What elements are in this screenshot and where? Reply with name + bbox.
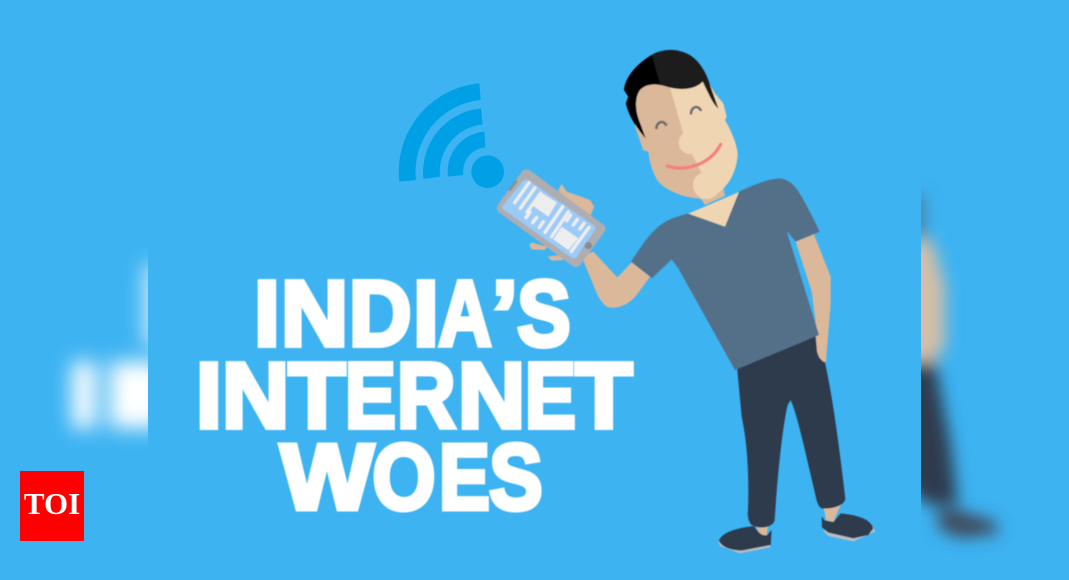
title line 1: S: [517, 262, 571, 366]
title line 1: N: [281, 262, 348, 366]
ankles: [755, 505, 841, 536]
trousers: [737, 330, 845, 528]
title line 1: I: [254, 262, 280, 366]
chin: [693, 172, 720, 199]
title line 3: E: [439, 425, 490, 529]
central sharp panel: [148, 0, 921, 580]
arm and hand holding phone: [529, 184, 650, 308]
shoe: left: [718, 526, 772, 553]
t-shirt: [631, 178, 820, 370]
blurred left background: enlarged title: [72, 265, 174, 428]
hair dark side: [624, 55, 660, 138]
nose: [679, 131, 701, 154]
title line 1: A: [438, 262, 492, 366]
neck: [688, 192, 739, 227]
title line 2: N: [458, 344, 525, 448]
icon: smartphone: [497, 169, 606, 267]
title line 2: E: [345, 344, 396, 448]
eyes: [656, 107, 701, 128]
title: [196, 262, 632, 529]
title line 1: ’: [492, 262, 518, 366]
neck shadow: [698, 187, 725, 205]
icon: wifi signal: [399, 83, 504, 188]
face: [635, 73, 738, 199]
title line 2: N: [222, 344, 289, 448]
title line 2: E: [525, 344, 576, 448]
hair: [624, 50, 718, 138]
logo: TOI: TOI: [24, 486, 80, 521]
title line 2: T: [288, 344, 345, 448]
title line 1: D: [349, 262, 412, 366]
title line 2: I: [196, 344, 222, 448]
head: [624, 50, 738, 205]
title line 1: I: [413, 262, 439, 366]
logo: TOI: [20, 471, 84, 541]
title line 3: O: [372, 425, 436, 529]
blurred right background: enlarged figure: [900, 195, 998, 538]
shoe: right: [822, 513, 875, 541]
title line 3: S: [489, 425, 543, 529]
smile: [667, 144, 721, 168]
right arm: [796, 234, 831, 362]
title line 2: T: [576, 344, 632, 448]
title line 3: W: [280, 425, 374, 529]
title line 2: R: [397, 344, 456, 448]
body: legs, torso and arms: [631, 178, 875, 553]
face shadow side: [635, 73, 702, 199]
illustration: man with phone: [497, 50, 875, 553]
